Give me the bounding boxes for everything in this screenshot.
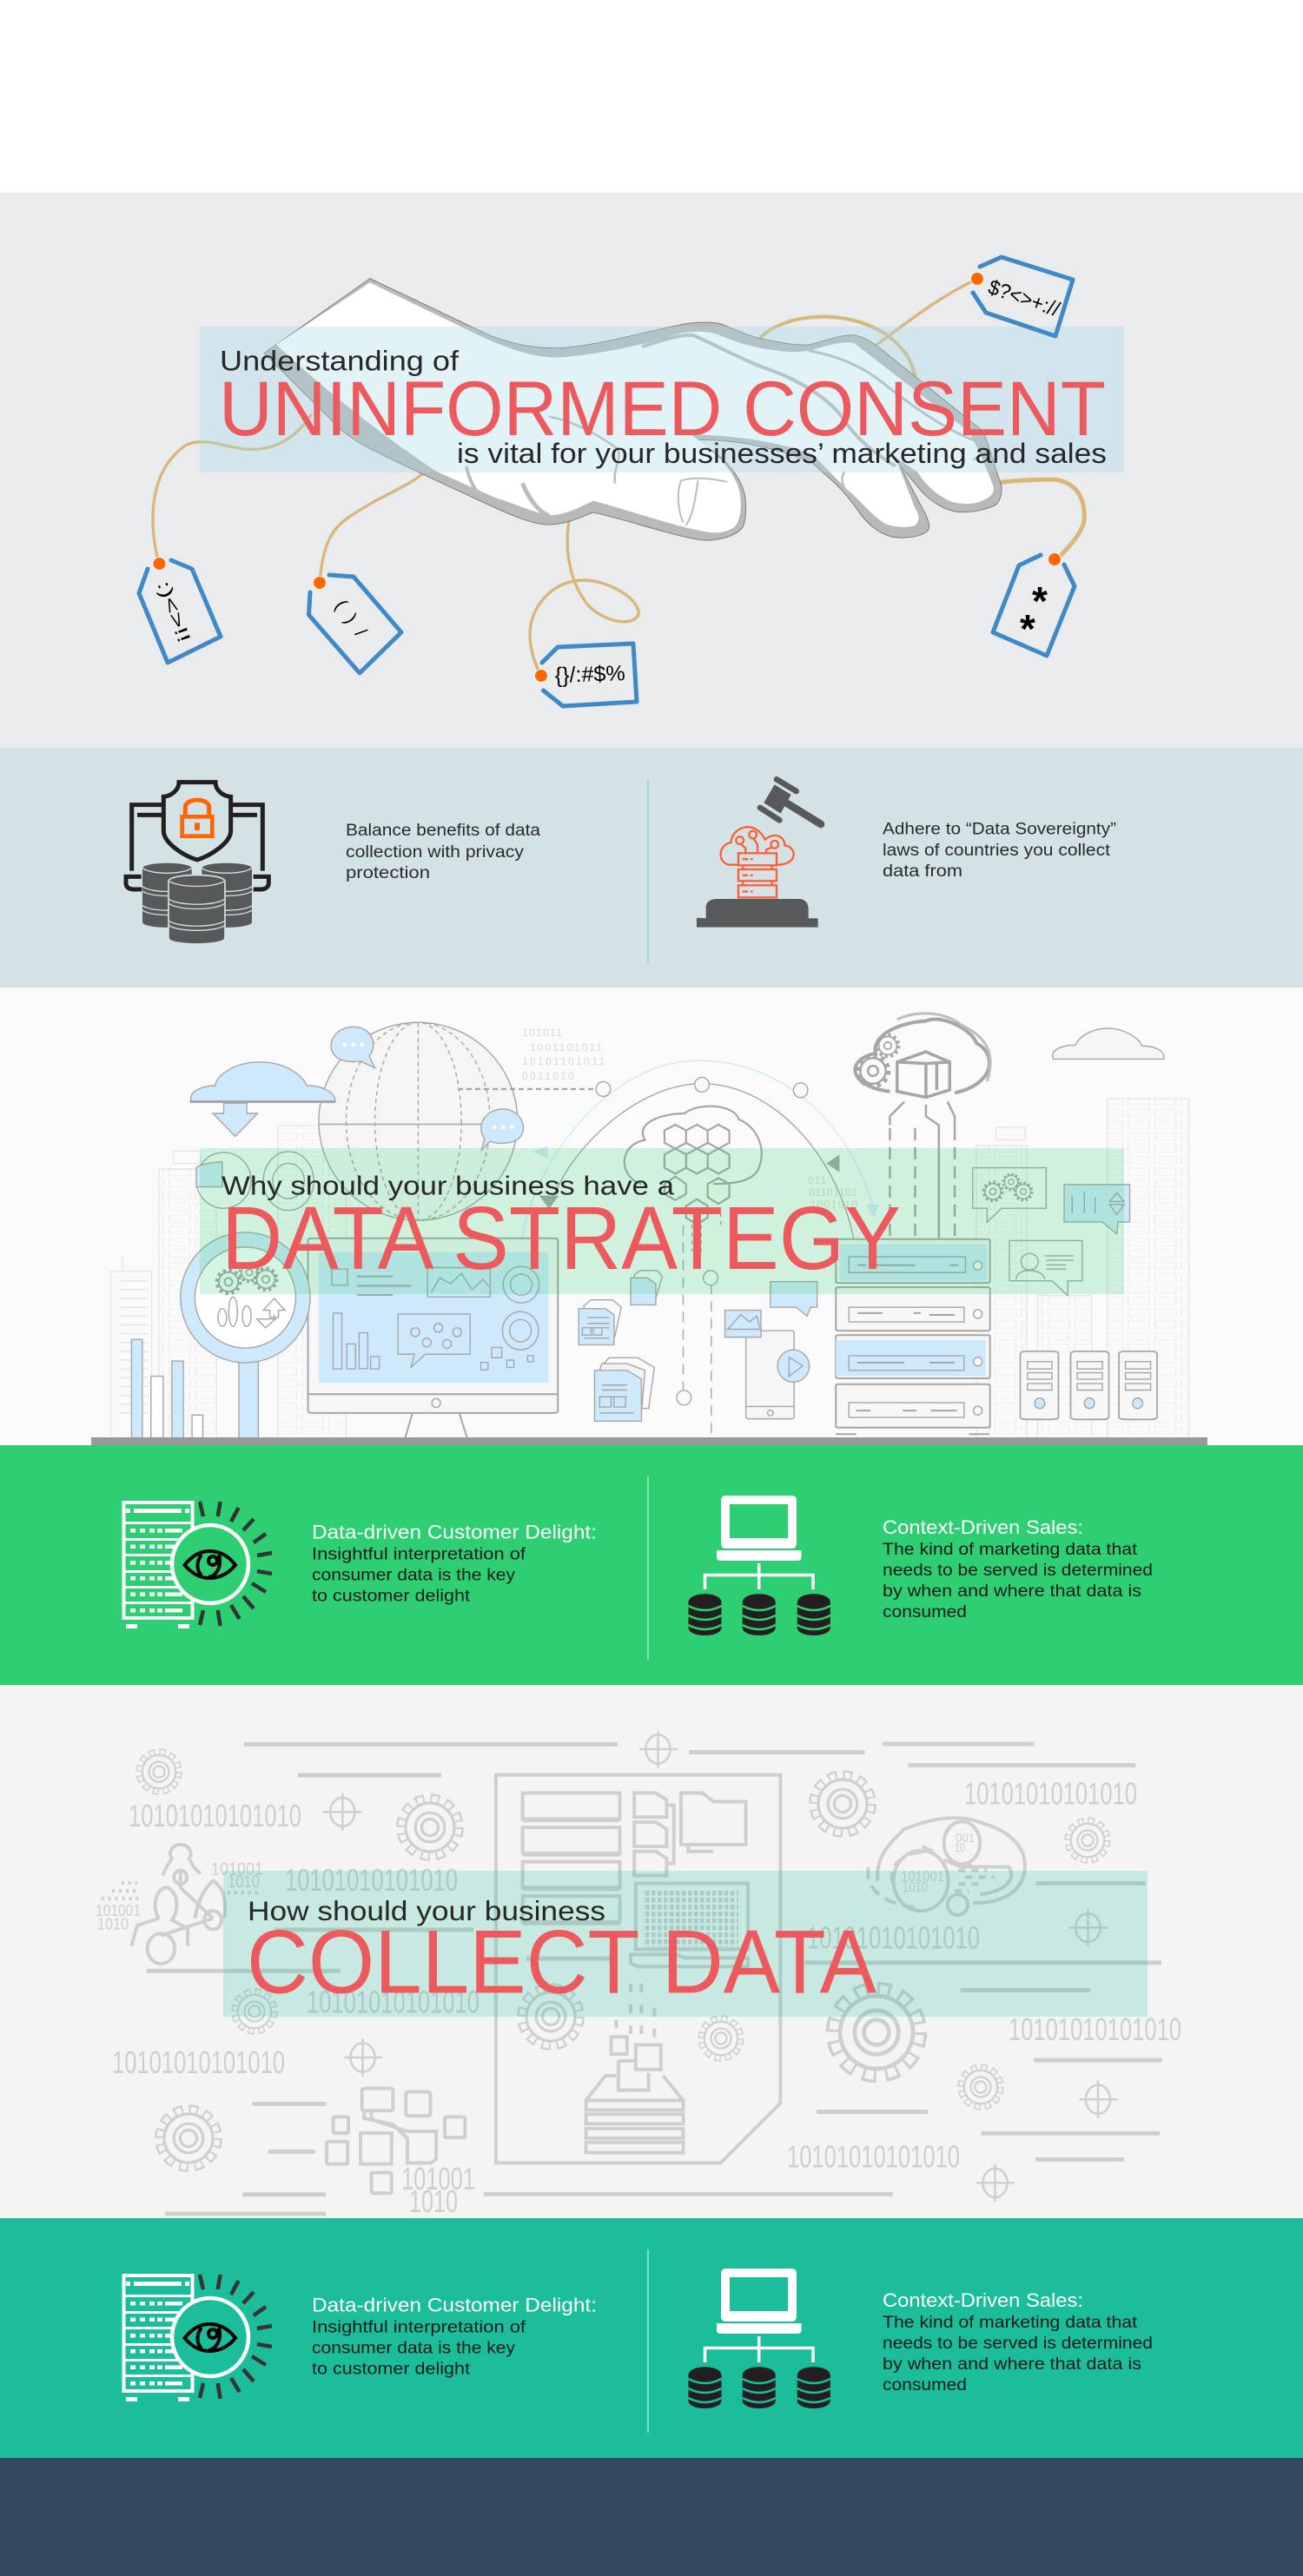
text: data sovereignty: Adhere to “Data Sovereignty” xyxy=(883,820,1116,839)
illustration: hand xyxy=(264,279,1002,540)
text: customer delight: Data-driven Customer Delight: xyxy=(312,2295,597,2315)
tag: smile xyxy=(139,558,221,663)
gears xyxy=(139,1752,1108,2167)
icon: shield and databases xyxy=(126,783,268,944)
ground bar xyxy=(91,1437,1207,1445)
icon: server and eye xyxy=(123,1502,272,1628)
panel: teal benefits xyxy=(0,2218,1303,2458)
text: customer delight: Insightful interpretation of xyxy=(312,1546,526,1563)
text: context-driven sales xyxy=(883,2289,1153,2394)
text: balance benefits: protection xyxy=(346,864,430,882)
binary digits: 011 xyxy=(808,1174,826,1186)
highlight band xyxy=(223,1871,1148,2017)
illustration: data city xyxy=(110,1014,1189,1438)
binary strings: 10101010101010 xyxy=(787,2138,960,2175)
text: customer delight: consumer data is the key xyxy=(312,1567,516,1584)
text: customer delight: to customer delight xyxy=(312,2361,471,2378)
text: data sovereignty xyxy=(883,820,1116,881)
icon: computer and databases xyxy=(688,1496,830,1635)
panel: collect data xyxy=(0,1685,1303,2219)
tag: url symbols: $?<>+:// xyxy=(985,275,1063,321)
text: customer delight: to customer delight xyxy=(312,1588,471,1605)
tag: asterisks xyxy=(993,552,1075,656)
text: balance benefits xyxy=(346,822,540,882)
text: balance benefits: collection with privacy xyxy=(346,843,525,862)
crosshairs xyxy=(323,1731,1117,2202)
icon: computer and databases xyxy=(688,2269,830,2408)
highlight band xyxy=(200,1148,1124,1294)
globe xyxy=(319,1022,518,1220)
panel: data strategy xyxy=(0,987,1303,1445)
binary digits: 10101101011 xyxy=(522,1055,605,1067)
heading: uninformed consent: is vital for your businesses’ marketing and sales xyxy=(457,438,1107,469)
tag: symbols: {}/:#$% xyxy=(554,661,625,688)
binary digits: 101011 xyxy=(522,1027,562,1039)
panel: privacy and sovereignty xyxy=(0,748,1303,987)
tag: symbols xyxy=(535,644,637,706)
binary digits: 1001101011 xyxy=(530,1041,602,1054)
footer bar xyxy=(0,2458,1303,2576)
heading: uninformed consent: UNINFORMED CONSENT xyxy=(219,365,1106,452)
binary strings: 001 xyxy=(956,1831,975,1846)
illustration: data collection background xyxy=(102,1744,1162,2214)
text: context-driven sales: by when and where that data is xyxy=(883,1582,1141,1601)
tag: asterisks: * xyxy=(1032,578,1048,624)
text: context-driven sales xyxy=(883,1516,1153,1622)
tag: asterisks: * xyxy=(1020,606,1035,651)
binary strings: 1010 xyxy=(903,1879,928,1895)
binary strings: 101001 xyxy=(401,2161,475,2196)
text: context-driven sales: Context-Driven Sales: xyxy=(883,1516,1083,1538)
binary strings: 10101010101010 xyxy=(1009,2011,1181,2047)
text: context-driven sales: The kind of marketing data that xyxy=(883,1541,1138,1559)
icon: gavel and cloud servers xyxy=(697,779,821,928)
heading: uninformed consent: Understanding of xyxy=(220,346,459,377)
binary strings: 10 xyxy=(955,1840,965,1855)
binary strings: 101001 xyxy=(901,1868,944,1885)
text: context-driven sales: consumed xyxy=(883,2376,967,2394)
text: customer delight xyxy=(312,1522,597,1605)
heading: collect data: COLLECT DATA xyxy=(247,1912,877,2013)
panel: green benefits xyxy=(0,1445,1303,1685)
text: data sovereignty: data from xyxy=(883,862,962,881)
text: customer delight: consumer data is the key xyxy=(312,2340,516,2357)
binary strings: 10101010101010 xyxy=(807,1919,980,1956)
small cloud xyxy=(1053,1028,1164,1059)
text: balance benefits: Balance benefits of data xyxy=(346,822,540,840)
text: context-driven sales: Context-Driven Sales: xyxy=(883,2289,1083,2311)
keyboard grid xyxy=(643,1891,738,1947)
heading: data strategy: Why should your business have a xyxy=(222,1171,675,1200)
text: context-driven sales: by when and where that data is xyxy=(883,2355,1141,2374)
text: context-driven sales: consumed xyxy=(883,1603,967,1622)
heading: collect data: How should your business xyxy=(248,1895,605,1926)
text: context-driven sales: needs to be served is determined xyxy=(883,1562,1153,1580)
tag: brackets xyxy=(309,575,401,673)
text: customer delight: Data-driven Customer Delight: xyxy=(312,1522,597,1542)
binary strings xyxy=(96,1775,1181,2219)
gears xyxy=(217,1035,1032,1293)
binary digits: 01101101 xyxy=(809,1186,857,1199)
binary strings: 1010 xyxy=(228,1873,260,1892)
binary strings: 101001 xyxy=(211,1860,263,1879)
tag: brackets: ()/ xyxy=(331,597,370,641)
text: customer delight xyxy=(312,2295,597,2378)
highlight band xyxy=(200,327,1124,472)
text: context-driven sales: needs to be served is determined xyxy=(883,2335,1153,2353)
binary strings: 10101010101010 xyxy=(964,1775,1137,1812)
icon: server and eye xyxy=(123,2275,272,2401)
tag cords xyxy=(153,279,1084,676)
binary digits: 1001010 xyxy=(810,1199,857,1211)
binary strings: 1010 xyxy=(97,1916,129,1933)
heading: data strategy: DATA STRATEGY xyxy=(222,1188,901,1288)
binary strings: 101001 xyxy=(96,1902,141,1919)
tag: url symbols xyxy=(971,257,1073,336)
binary strings: 10101010101010 xyxy=(112,2044,285,2080)
tag: smile: :)<>!! xyxy=(153,578,194,645)
binary strings: 10101010101010 xyxy=(307,1984,480,2020)
text: context-driven sales: The kind of marketing data that xyxy=(883,2314,1138,2332)
binary digits: 0011010 xyxy=(522,1070,574,1082)
binary strings: 10101010101010 xyxy=(285,1862,458,1898)
heading: uninformed consent xyxy=(219,346,1107,469)
panel: uninformed consent xyxy=(0,193,1303,748)
binary digits xyxy=(522,1027,857,1211)
binary strings: 10101010101010 xyxy=(129,1798,301,1833)
text: customer delight: Insightful interpretation of xyxy=(312,2319,526,2336)
binary strings: 1010 xyxy=(409,2183,458,2219)
text: data sovereignty: laws of countries you collect xyxy=(883,842,1111,860)
